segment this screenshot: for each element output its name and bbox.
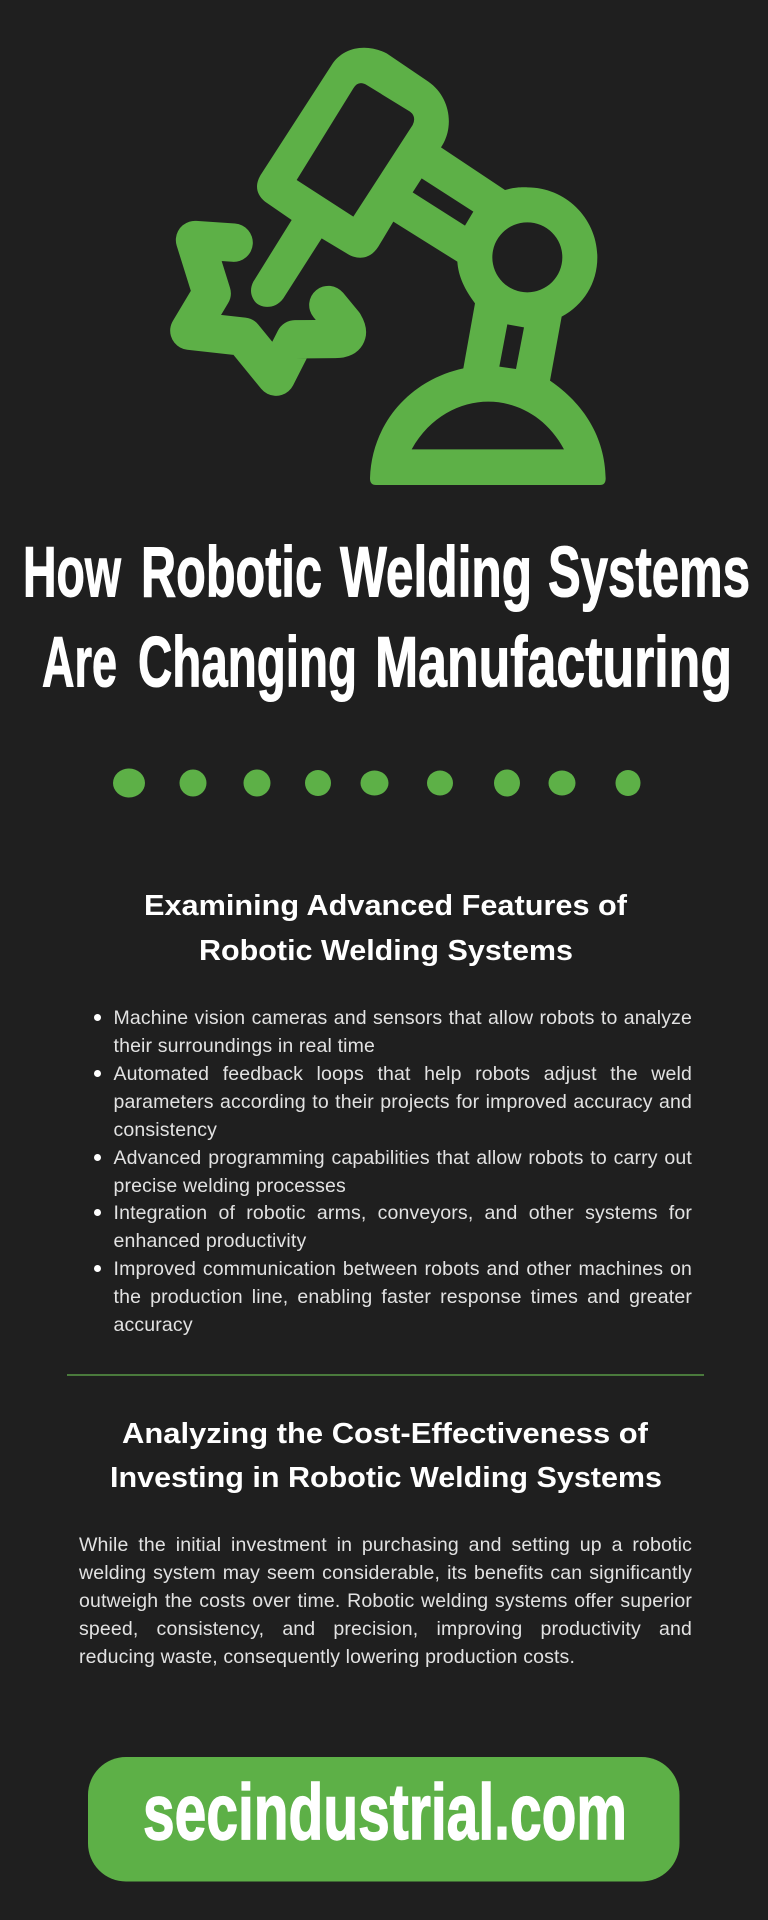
heading: cost-effectiveness: Analyzing the Cost-Effectiveness of <box>122 1418 649 1450</box>
heading: cost-effectiveness <box>110 1418 662 1494</box>
bullet list: advanced features: accuracy <box>114 1314 193 1336</box>
robot arm silhouette <box>251 48 606 485</box>
bullet list: advanced features: Advanced programming capabilities that allow robots to carry out <box>114 1147 692 1169</box>
bullet list: advanced features: their surroundings in real time <box>114 1035 375 1057</box>
heading: advanced features <box>144 890 628 967</box>
weld spark <box>189 240 347 377</box>
bullet list: advanced features: parameters according to their projects for improved accuracy and <box>114 1091 692 1113</box>
paragraph: cost-effectiveness: speed, consistency, and precision, improving productivity and <box>79 1618 692 1640</box>
heading: advanced features: Robotic Welding Systems <box>199 935 573 967</box>
icon: robotic welding arm <box>170 48 606 485</box>
paragraph: cost-effectiveness: outweigh the costs over time. Robotic welding systems offer superior <box>79 1590 692 1612</box>
bullet list: advanced features: precise welding processes <box>114 1175 346 1197</box>
bullet list: advanced features: consistency <box>114 1119 217 1141</box>
bullet list: advanced features: Improved communication between robots and other machines on <box>114 1258 692 1280</box>
row of green dots <box>113 768 640 798</box>
bullet list: advanced features: the production line, enabling faster response times and greater <box>114 1286 692 1308</box>
bullet list: advanced features: enhanced productivity <box>114 1230 306 1252</box>
title: Robotic <box>141 534 322 612</box>
bullet list: advanced features: Machine vision cameras and sensors that allow robots to analyze <box>114 1007 692 1029</box>
heading: cost-effectiveness: Investing in Robotic Welding Systems <box>110 1462 662 1494</box>
paragraph: cost-effectiveness: While the initial investment in purchasing and setting up a robotic <box>79 1534 692 1556</box>
heading: advanced features: Examining Advanced Features of <box>144 890 628 922</box>
paragraph: cost-effectiveness: reducing waste, consequently lowering production costs. <box>79 1646 575 1668</box>
paragraph: cost-effectiveness: welding system may seem considerable, its benefits can significantly <box>79 1562 692 1584</box>
title <box>23 534 750 702</box>
title: How <box>23 534 122 612</box>
paragraph: cost-effectiveness <box>79 1534 692 1668</box>
bullet list: advanced features <box>94 1007 692 1336</box>
title: Welding <box>340 534 532 612</box>
bullet list: advanced features: Integration of robotic arms, conveyors, and other systems for <box>114 1202 692 1224</box>
call to action: website <box>88 1757 680 1882</box>
title: Changing <box>138 624 357 702</box>
title: Are <box>42 624 117 702</box>
bullet list: advanced features: Automated feedback loops that help robots adjust the weld <box>114 1063 692 1085</box>
